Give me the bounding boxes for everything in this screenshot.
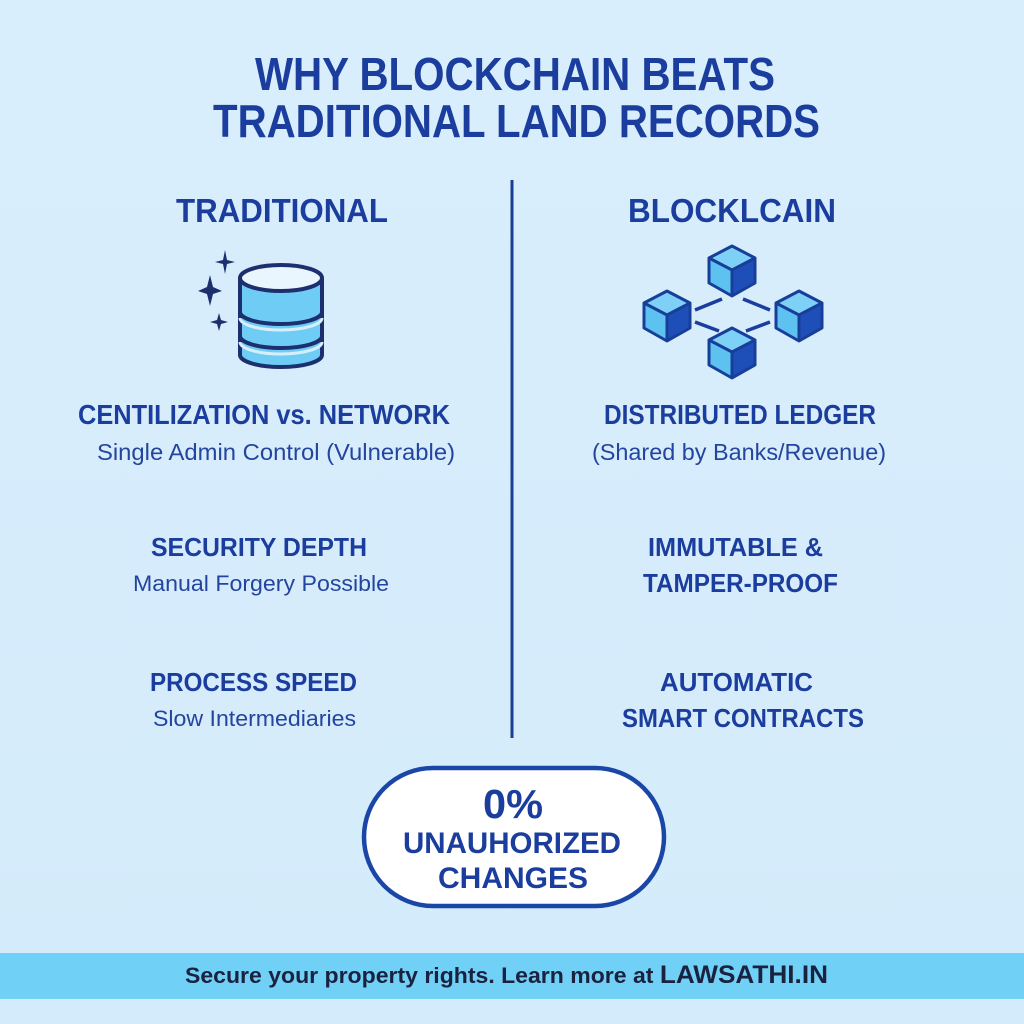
item: centralization: CENTILIZATION vs. NETWORK [78,399,450,430]
icon: database [198,250,322,367]
callout: 0% unauthorized changes [364,768,664,906]
callout: 0% unauthorized changes: UNAUHORIZED [403,827,621,860]
item: process speed: Slow Intermediaries [153,706,356,731]
footer banner: Secure your property rights. Learn more at LAWSATHI.IN [185,961,828,989]
item: distributed ledger [592,399,886,465]
item: distributed ledger: (Shared by Banks/Revenue) [592,439,886,465]
title: WHY BLOCKCHAIN BEATS [255,48,775,100]
title [213,48,820,147]
item: smart contracts: AUTOMATIC [660,667,813,697]
item: immutable: TAMPER-PROOF [643,568,838,598]
callout: 0% unauthorized changes: 0% [483,781,543,827]
item: process speed: PROCESS SPEED [150,667,357,697]
title: TRADITIONAL LAND RECORDS [213,95,820,147]
item: immutable: IMMUTABLE & [648,532,823,562]
heading: blockchain: BLOCKLCAIN [628,192,836,229]
divider [510,180,514,738]
icon: cube network [644,246,822,378]
item: security depth: Manual Forgery Possible [133,571,389,596]
item: security depth [133,532,389,596]
item: smart contracts [622,667,864,733]
item: distributed ledger: DISTRIBUTED LEDGER [604,399,876,430]
item: process speed [150,667,357,731]
heading: traditional: TRADITIONAL [176,192,388,229]
panel: blockchain [592,192,886,733]
footer banner [0,953,1024,999]
panel: traditional [78,192,455,731]
callout: 0% unauthorized changes: CHANGES [438,862,588,895]
item: centralization: Single Admin Control (Vulnerable) [97,439,455,465]
item: security depth: SECURITY DEPTH [151,532,367,562]
item: smart contracts: SMART CONTRACTS [622,703,864,733]
item: centralization [78,399,455,465]
item: immutable [643,532,838,598]
